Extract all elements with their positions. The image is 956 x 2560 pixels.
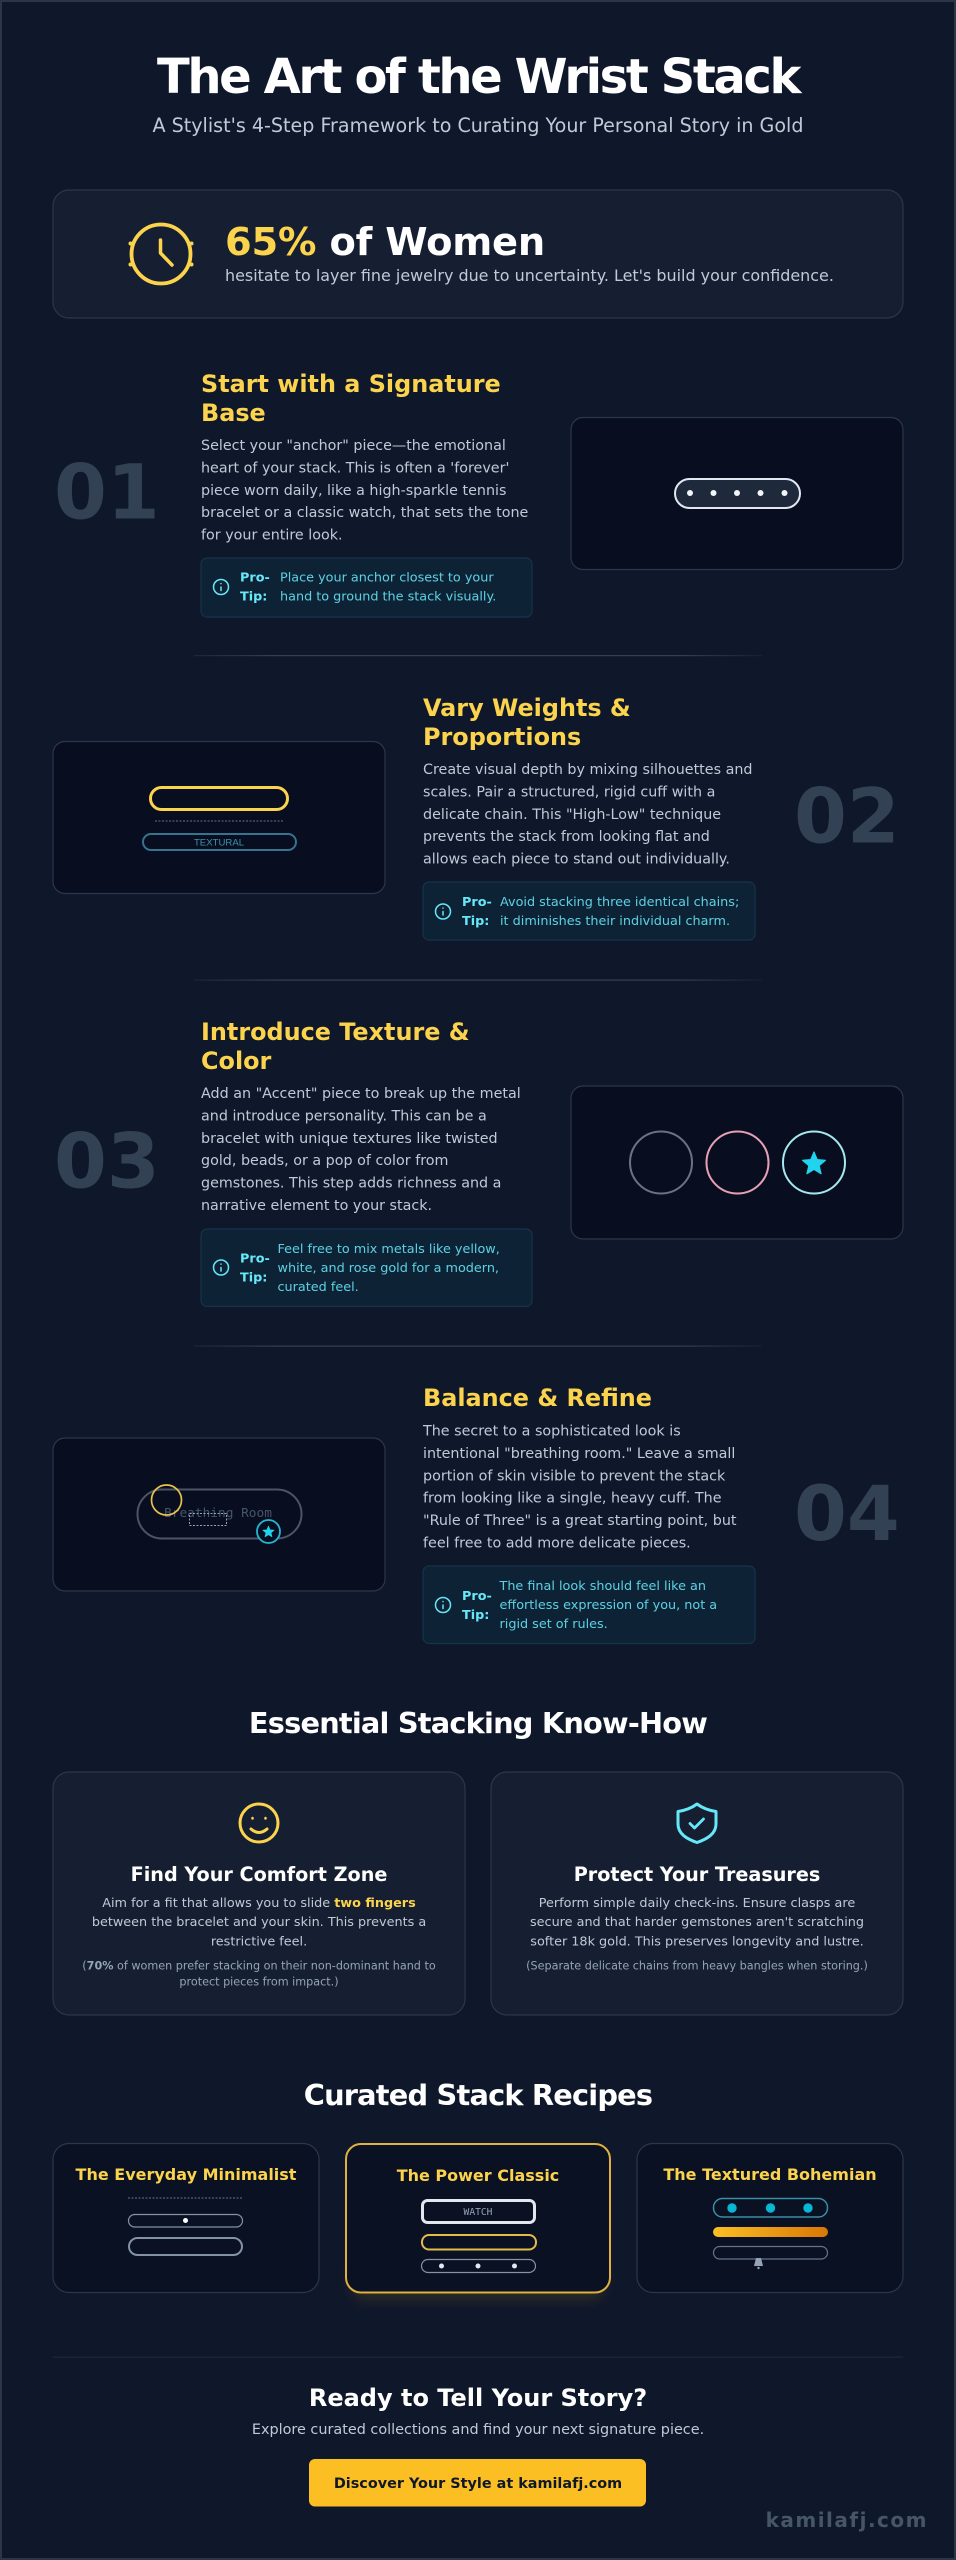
panel: 65% statistic	[53, 190, 903, 318]
step 4	[53, 1384, 900, 1644]
card heading: Find Your Comfort Zone	[131, 1863, 387, 1886]
cta button	[309, 2459, 646, 2506]
watermark: kamilafj.com	[766, 2508, 928, 2532]
pro tip text: Feel free to mix metals like yellow,	[278, 1242, 500, 1257]
cta text: Explore curated collections and find your next signature piece.	[252, 2422, 704, 2438]
section heading: recipes: Curated Stack Recipes	[304, 2078, 652, 2112]
step 1 body text: heart of your stack. This is often a 'forever'	[201, 460, 509, 476]
step 2 body text: Create visual depth by mixing silhouettes and	[423, 762, 752, 778]
gold bar bracelet	[713, 2227, 828, 2237]
step 3 body text: gold, beads, or a pop of color from	[201, 1153, 448, 1169]
step 3 body text: bracelet with unique textures like twisted	[201, 1131, 498, 1147]
step 3 body text: gemstones. This step adds richness and a	[201, 1176, 501, 1192]
step 2 body text: prevents the stack from looking flat and	[423, 829, 710, 845]
card body text: restrictive feel.	[211, 1934, 307, 1949]
step 4 body text: "Rule of Three" is a great starting point, but	[423, 1513, 737, 1529]
step 3	[54, 1018, 903, 1306]
card footnote: protect pieces from impact.)	[179, 1976, 339, 1988]
step number 01: 01	[54, 448, 160, 536]
icon: info	[436, 1598, 450, 1612]
icon: watch	[129, 224, 193, 284]
step 2 pro tip	[423, 882, 755, 940]
recipe title: The Power Classic	[397, 2166, 559, 2185]
step 2 heading: Vary Weights &	[423, 694, 631, 722]
icon: info	[214, 1260, 228, 1275]
step 3 body text: and introduce personality. This can be a	[201, 1108, 487, 1124]
pro tip text: effortless expression of you, not a	[500, 1598, 717, 1613]
icon: shield check	[678, 1804, 716, 1842]
pro tip label: Tip:	[462, 914, 489, 929]
card body text: softer 18k gold. This preserves longevity and lustre.	[530, 1934, 864, 1949]
step 3 body text: narrative element to your stack.	[201, 1198, 432, 1214]
card body text: secure and that harder gemstones aren't scratching	[530, 1915, 864, 1930]
step 4 pro tip	[423, 1566, 755, 1644]
icon: info	[436, 904, 450, 919]
textural bracelet	[143, 834, 296, 850]
bangle outline	[138, 1490, 302, 1538]
recipe card: everyday minimalist	[53, 2144, 319, 2292]
card body text: Aim for a fit that allows you to slide two fingers	[102, 1896, 416, 1911]
delicate chain	[190, 1514, 226, 1526]
pro tip text: it diminishes their individual charm.	[500, 914, 730, 929]
step 1 body text: bracelet or a classic watch, that sets the tone	[201, 505, 529, 521]
icon: smile	[240, 1804, 278, 1842]
step 1 heading: Base	[201, 399, 266, 427]
step 1	[54, 370, 903, 617]
beaded bracelet	[714, 2198, 828, 2217]
card body text: Perform simple daily check-ins. Ensure clasps are	[539, 1896, 855, 1911]
section heading: know-how: Essential Stacking Know-How	[249, 1706, 707, 1740]
pro tip text: The final look should feel like an	[498, 1579, 706, 1594]
watch	[422, 2200, 534, 2222]
panel: breathing room illustration	[53, 1438, 385, 1591]
tennis bracelet	[422, 2260, 536, 2272]
step 2 body text: delicate chain. This "High-Low" technique	[423, 807, 721, 823]
delicate chain	[155, 820, 283, 822]
step 3 pro tip	[201, 1229, 532, 1306]
recipe title: The Textured Bohemian	[663, 2165, 877, 2184]
step 4 body text: portion of skin visible to prevent the stack	[423, 1468, 726, 1484]
pro tip label: Pro-	[462, 1589, 492, 1604]
icon: info	[214, 580, 228, 594]
step 2 body text: allows each piece to stand out individually.	[423, 852, 730, 868]
card body text: between the bracelet and your skin. This prevents a	[92, 1915, 426, 1930]
call to action	[252, 2384, 704, 2506]
charm chain	[714, 2246, 828, 2269]
pro tip text: curated feel.	[278, 1280, 359, 1295]
gold ring	[152, 1485, 182, 1515]
step 4 body text: from looking like a single, heavy cuff. The	[423, 1491, 722, 1507]
breathing room label: Breathing Room	[164, 1506, 272, 1521]
subtitle: A Stylist's 4-Step Framework to Curating Your Personal Story in Gold	[153, 114, 803, 137]
step 1 body text: piece worn daily, like a high-sparkle tennis	[201, 483, 506, 499]
textural bracelet: TEXTURAL	[194, 838, 245, 848]
step number 04: 04	[794, 1469, 900, 1558]
statistic description: hesitate to layer fine jewelry due to uncertainty. Let's build your confidence.	[225, 266, 834, 285]
pro tip label: Pro-	[240, 1252, 270, 1266]
step 2 heading: Proportions	[423, 723, 581, 751]
step 1 body text: for your entire look.	[201, 528, 343, 544]
cta heading: Ready to Tell Your Story?	[309, 2384, 647, 2412]
recipe title: The Everyday Minimalist	[76, 2165, 297, 2184]
step 2	[53, 694, 900, 940]
pro tip text: hand to ground the stack visually.	[280, 590, 496, 604]
gold cuff	[422, 2235, 536, 2250]
gemstone ring	[783, 1132, 845, 1194]
card: protect treasures	[491, 1772, 903, 2015]
rose gold ring	[706, 1132, 768, 1194]
pro tip label: Pro-	[240, 570, 270, 586]
slim bangle	[129, 2238, 242, 2255]
recipe card: textured bohemian	[637, 2144, 903, 2292]
tennis bracelet	[675, 479, 800, 508]
card: comfort zone	[53, 1772, 465, 2015]
panel: weights illustration	[53, 742, 385, 894]
pro tip label: Pro-	[462, 895, 492, 910]
pro tip text: white, and rose gold for a modern,	[278, 1261, 499, 1276]
step 3 heading: Color	[201, 1047, 272, 1075]
step 1 pro tip	[201, 558, 532, 617]
step 1 body text: Select your "anchor" piece—the emotional	[201, 438, 506, 454]
statistic heading: 65% of Women	[225, 220, 545, 265]
pro tip text: Avoid stacking three identical chains;	[500, 895, 739, 910]
gold cuff	[150, 788, 288, 810]
recipe card: power classic	[346, 2144, 610, 2300]
panel: anchor bracelet illustration	[571, 418, 903, 570]
pro tip label: Tip:	[240, 1270, 267, 1286]
title: The Art of the Wrist Stack	[157, 49, 802, 105]
card heading: Protect Your Treasures	[574, 1863, 820, 1886]
silver ring	[630, 1132, 692, 1194]
pro tip text: rigid set of rules.	[500, 1617, 608, 1632]
card footnote: (70% of women prefer stacking on their non-dominant hand to	[82, 1960, 436, 1972]
step 4 body text: feel free to add more delicate pieces.	[423, 1536, 691, 1552]
pro tip label: Tip:	[240, 590, 267, 604]
step 2 body text: scales. Pair a structured, rigid cuff with a	[423, 784, 715, 800]
step 4 body text: intentional "breathing room." Leave a small	[423, 1446, 735, 1462]
step 3 body text: Add an "Accent" piece to break up the metal	[201, 1086, 521, 1102]
card footnote: (Separate delicate chains from heavy bangles when storing.)	[526, 1960, 868, 1972]
cta button: Discover Your Style at kamilafj.com	[334, 2476, 622, 2492]
fine chain	[128, 2197, 243, 2199]
pro tip text: Place your anchor closest to your	[280, 570, 494, 586]
step number 02: 02	[794, 772, 900, 860]
step number 03: 03	[54, 1116, 160, 1206]
gemstone charm	[257, 1520, 280, 1543]
step 3 heading: Introduce Texture &	[201, 1018, 470, 1046]
panel: accent bracelets illustration	[571, 1086, 903, 1239]
step 1 heading: Start with a Signature	[201, 370, 501, 398]
step 4 heading: Balance & Refine	[423, 1384, 652, 1412]
step 4 body text: The secret to a sophisticated look is	[422, 1424, 681, 1440]
tennis bracelet	[128, 2214, 242, 2227]
watch: WATCH	[464, 2207, 493, 2218]
pro tip label: Tip:	[462, 1608, 489, 1623]
